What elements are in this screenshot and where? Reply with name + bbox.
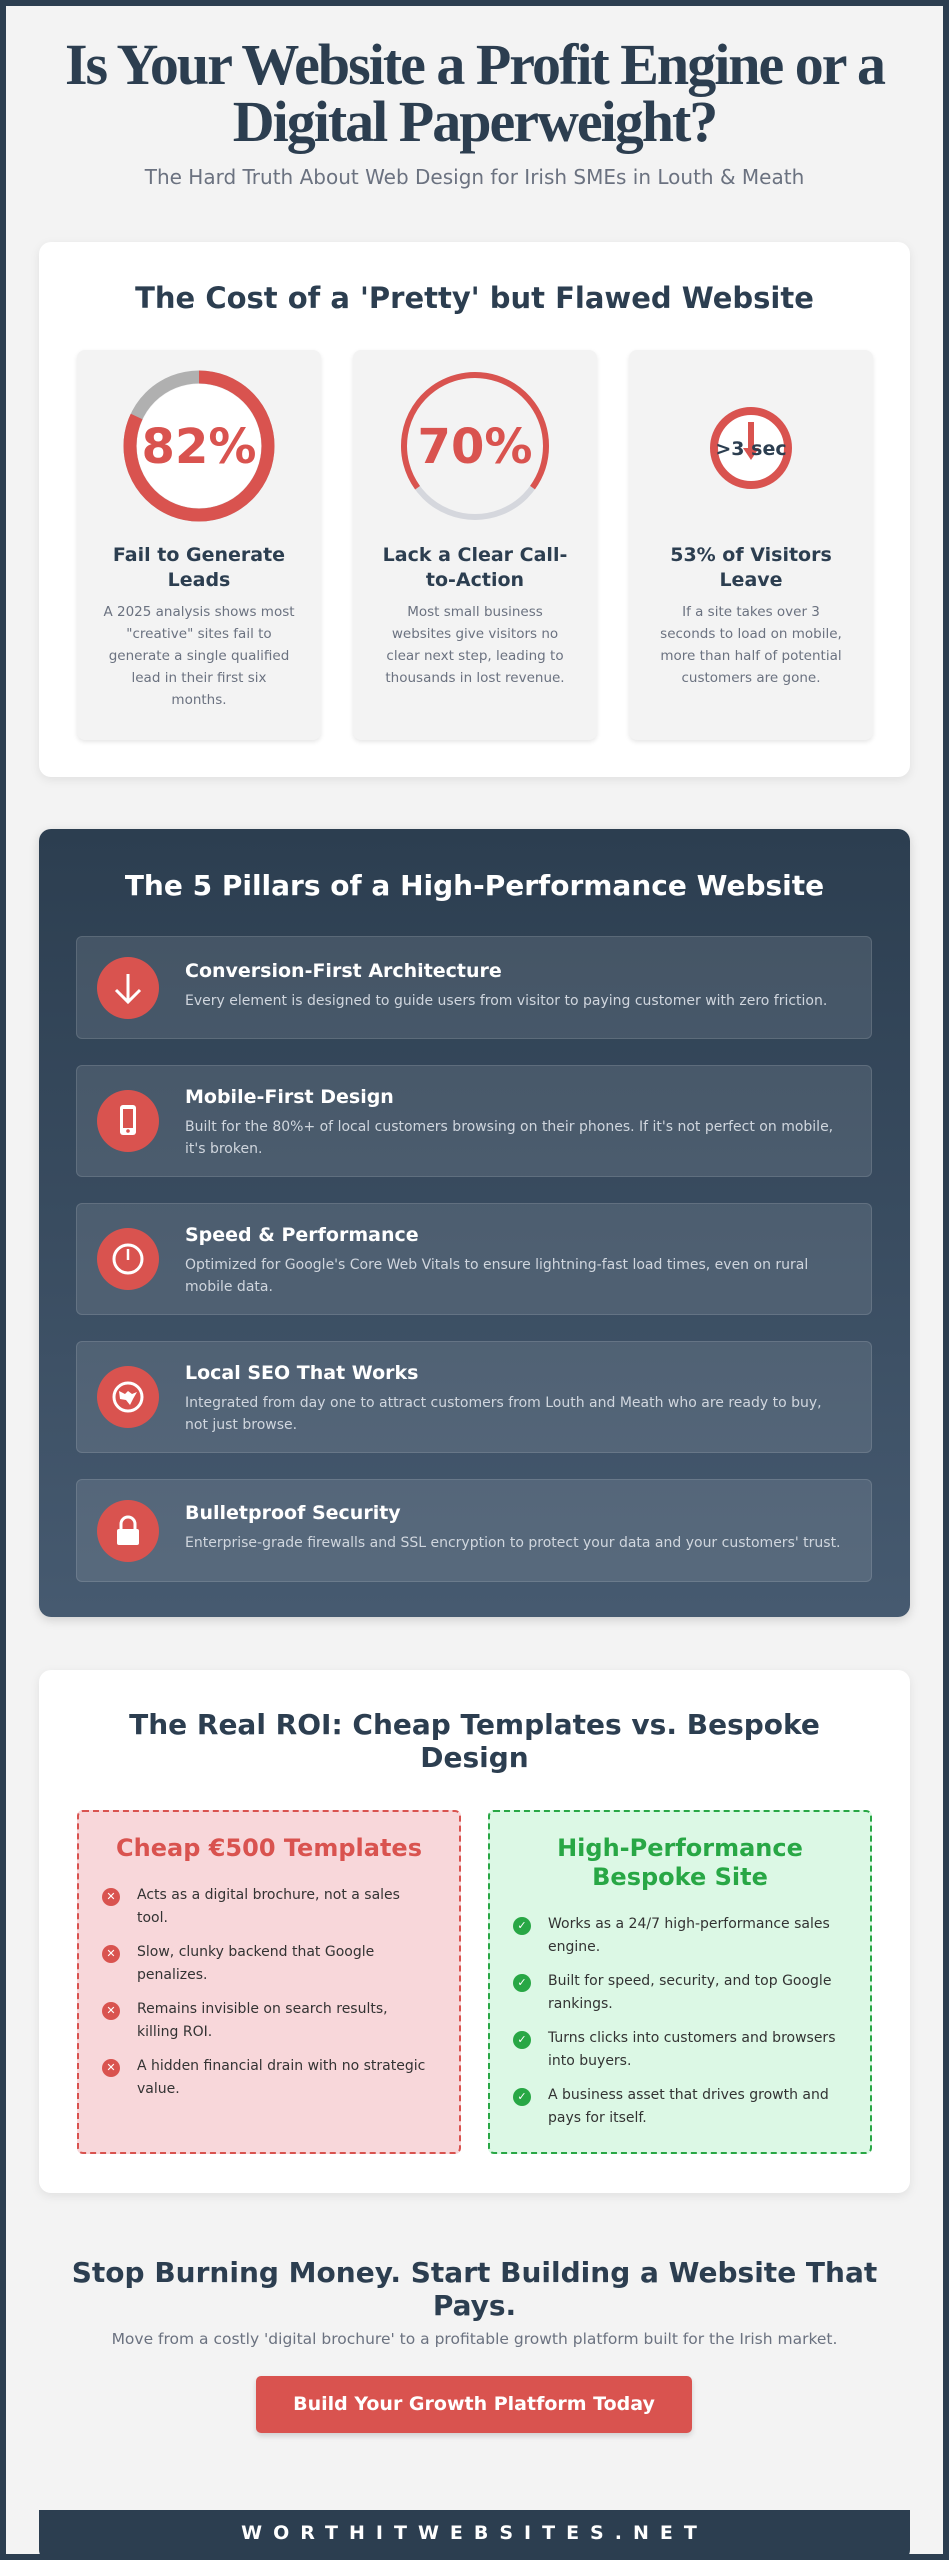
pillar 3: Optimized for Google's Core Web Vitals to ensure lightning-fast load times, even on rural mobile data. [185, 1257, 808, 1295]
pillar 5: Enterprise-grade firewalls and SSL encryption to protect your data and your customers' trust. [185, 1535, 841, 1551]
box: cheap templates: Cheap €500 Templates [116, 1834, 422, 1862]
title: Digital Paperweight? [233, 89, 716, 154]
CTA subtext: Move from a costly 'digital brochure' to a profitable growth platform built for the Irish market. [112, 2330, 837, 2348]
pillar 4: Integrated from day one to attract customers from Louth and Meath who are ready to buy, not just browse. [185, 1395, 822, 1433]
box: cheap templates: ✕ [106, 1947, 116, 1960]
box: bespoke site: ✓ [517, 2090, 527, 2103]
pillar 4 [76, 1341, 872, 1453]
box: bespoke site: Turns clicks into customers and browsers into buyers. [548, 2030, 836, 2069]
box: cheap templates: Slow, clunky backend that Google penalizes. [137, 1944, 374, 1983]
heading: ROI: The Real ROI: Cheap Templates vs. Bespoke Design [129, 1708, 820, 1774]
icon: stopwatch [97, 1228, 159, 1290]
pillar 1: Every element is designed to guide users from visitor to paying customer with zero friction. [185, 993, 827, 1009]
box: cheap templates: A hidden financial drain with no strategic value. [137, 2058, 425, 2097]
heading: cost: The Cost of a 'Pretty' but Flawed Website [135, 281, 814, 315]
box: bespoke site [488, 1810, 872, 2154]
stat card: 53%: 53% of Visitors Leave [670, 544, 832, 591]
subtitle: The Hard Truth About Web Design for Irish SMEs in Louth & Meath [145, 165, 804, 189]
title [65, 32, 886, 154]
CTA button [256, 2376, 692, 2433]
donut 70%: 70% [418, 419, 532, 475]
donut 70% [401, 372, 549, 520]
panel: 5 pillars [39, 829, 910, 1617]
pillar 2: Mobile-First Design [185, 1086, 394, 1108]
pillar 3 [76, 1203, 872, 1315]
box: bespoke site: High-Performance [557, 1834, 803, 1862]
stat card: 82%: Fail to Generate Leads [113, 544, 285, 591]
icon: clock: >3 sec [715, 438, 787, 460]
pillar 3: Speed & Performance [185, 1224, 419, 1246]
stat card: 82%: A 2025 analysis shows most "creative" sites fail to generate a single qualified lead in their first six months. [103, 604, 295, 708]
pillar 1 [76, 936, 872, 1039]
icon: phone [97, 1090, 159, 1152]
panel: cost of flawed website [39, 242, 910, 777]
donut 82% [124, 370, 274, 522]
stat card: 70% [353, 350, 597, 740]
pillar 1: Conversion-First Architecture [185, 960, 502, 982]
stat card: 70%: Lack a Clear Call-to-Action [383, 544, 567, 591]
stat card: 53%: If a site takes over 3 seconds to load on mobile, more than half of potential customers are gone. [660, 604, 842, 686]
stat card: 82% [77, 350, 321, 740]
donut 82%: 82% [142, 419, 256, 475]
box: cheap templates: Remains invisible on search results, killing ROI. [137, 2001, 388, 2040]
box: bespoke site: Works as a 24/7 high-performance sales engine. [548, 1916, 830, 1955]
pillar 2 [76, 1065, 872, 1177]
box: cheap templates: ✕ [106, 2004, 116, 2017]
title: Is Your Website a Profit Engine or a [65, 32, 884, 97]
box: bespoke site: Bespoke Site [592, 1863, 768, 1891]
box: cheap templates: Acts as a digital brochure, not a sales tool. [137, 1887, 400, 1926]
box: bespoke site: ✓ [517, 2033, 527, 2046]
panel: ROI comparison [39, 1670, 910, 2193]
box: bespoke site: ✓ [517, 1976, 527, 1989]
CTA heading: Stop Burning Money. Start Building a Website That Pays. [72, 2256, 877, 2322]
pillar 4: Local SEO That Works [185, 1362, 418, 1384]
stat card: 70%: Most small business websites give visitors no clear next step, leading to thousands in lost revenue. [385, 604, 565, 686]
icon: lock [97, 1500, 159, 1562]
icon: globe [97, 1366, 159, 1428]
footer [39, 2510, 910, 2560]
CTA button: Build Your Growth Platform Today [293, 2393, 655, 2415]
pillar 5: Bulletproof Security [185, 1502, 401, 1524]
stat card: 53% [629, 350, 873, 740]
box: cheap templates [77, 1810, 461, 2154]
heading: pillars: The 5 Pillars of a High-Performance Website [125, 869, 824, 902]
icon: arrow down [97, 957, 159, 1019]
footer: WORTHITWEBSITES.NET [241, 2522, 708, 2544]
box: cheap templates: ✕ [106, 1890, 116, 1903]
pillar 2: Built for the 80%+ of local customers browsing on their phones. If it's not perfect on mobile, it's broken. [185, 1119, 833, 1157]
box: bespoke site: ✓ [517, 1919, 527, 1932]
box: bespoke site: Built for speed, security, and top Google rankings. [548, 1973, 831, 2012]
pillar 5 [76, 1479, 872, 1582]
icon: clock [710, 407, 792, 489]
box: cheap templates: ✕ [106, 2061, 116, 2074]
box: bespoke site: A business asset that drives growth and pays for itself. [548, 2087, 829, 2126]
